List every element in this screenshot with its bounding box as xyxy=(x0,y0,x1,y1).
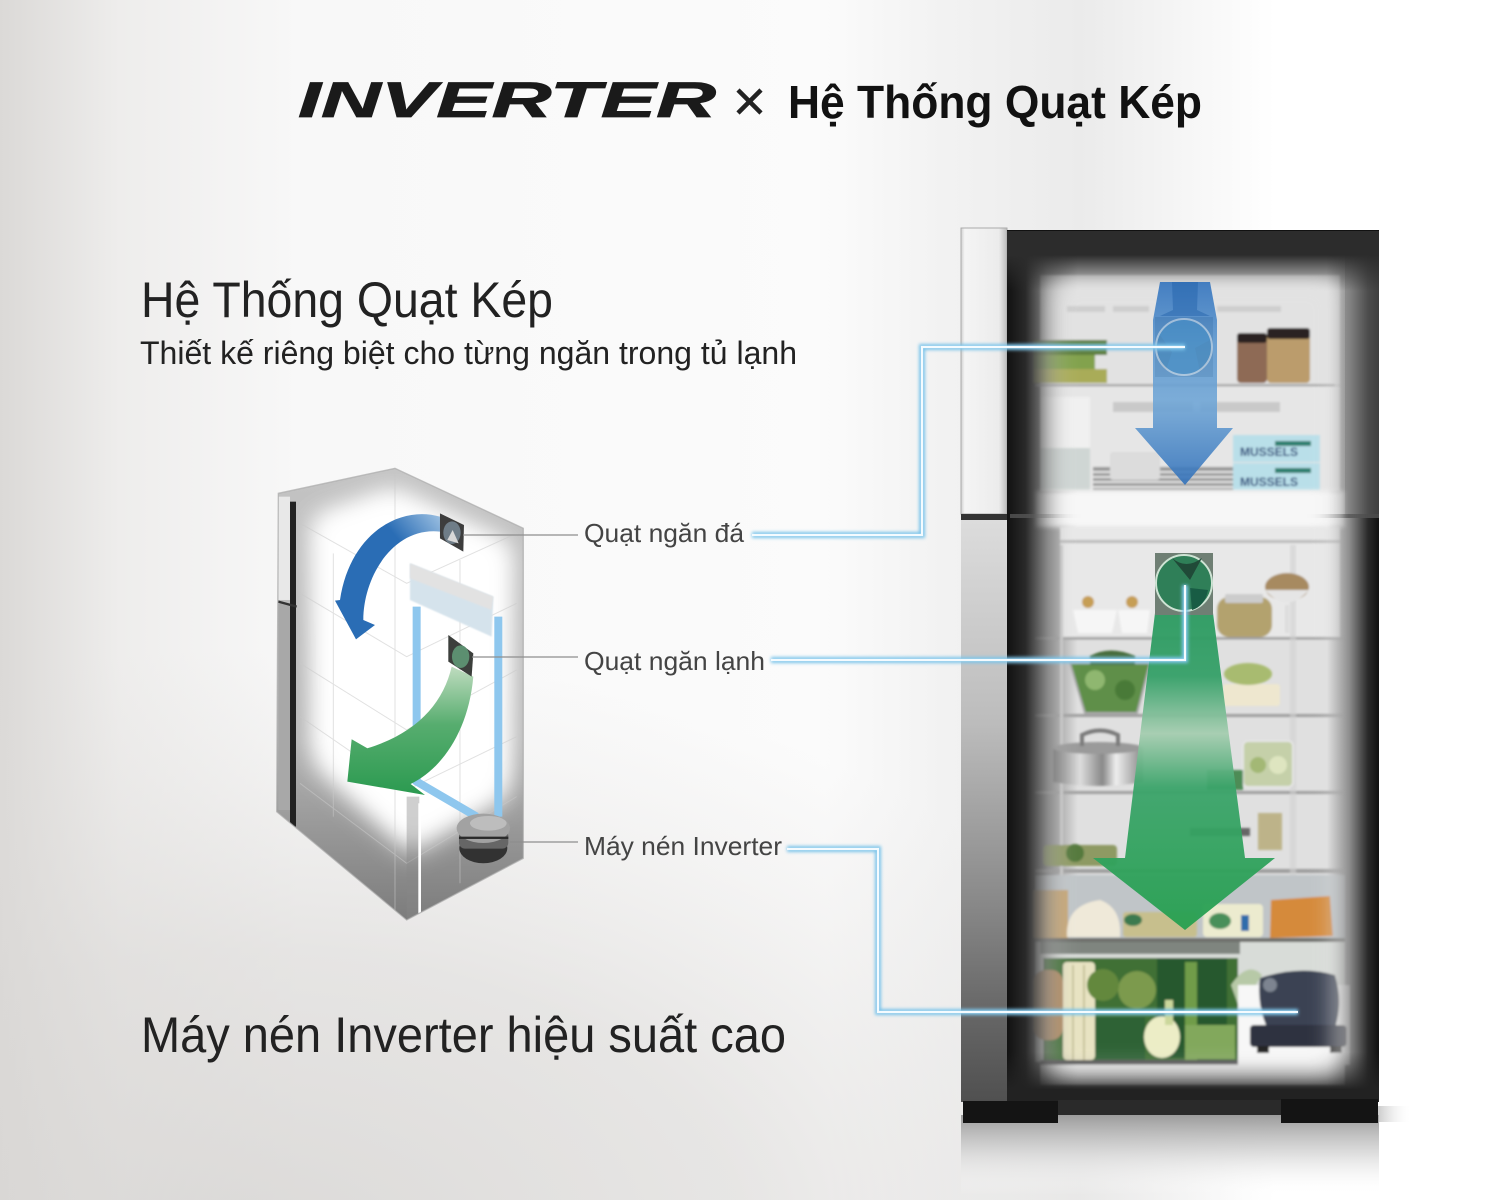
lit interior gradient xyxy=(1007,235,1379,1095)
freezer fan face over arrow xyxy=(1156,319,1212,375)
freezer fan xyxy=(1155,317,1213,377)
top fade xyxy=(1007,231,1379,291)
callout lines xyxy=(752,347,1298,1012)
line: freezer fan xyxy=(752,347,1185,535)
fridge fan xyxy=(448,635,473,677)
label: fridge fan: Quạt ngăn lạnh xyxy=(584,646,765,676)
label: freezer fan: Quạt ngăn đá xyxy=(584,518,745,548)
compressor in fridge xyxy=(1250,971,1347,1053)
left door side top xyxy=(961,228,1007,514)
heading: dual fan system: Hệ Thống Quạt Kép xyxy=(141,272,553,328)
vegetable drawer top row xyxy=(1033,875,1345,938)
blue down arrow xyxy=(1135,282,1233,485)
subheading: Thiết kế riêng biệt cho từng ngăn trong tủ lạnh xyxy=(140,335,797,371)
heading: inverter compressor: Máy nén Inverter hiệu suất cao xyxy=(141,1007,786,1063)
leader lines xyxy=(463,535,578,842)
door front base xyxy=(1007,230,1379,1102)
multiply sign xyxy=(738,90,761,113)
blue arrow xyxy=(335,514,440,639)
reflection xyxy=(961,1115,1379,1195)
green down arrow xyxy=(1093,613,1275,930)
foot shadow xyxy=(1378,1106,1412,1122)
cabinet outline xyxy=(277,468,523,920)
freezer shelf and contents: MUSSELS xyxy=(1240,445,1298,459)
refrigerant pipes xyxy=(417,607,498,817)
crisper vegetables xyxy=(1033,942,1350,1065)
front corner edge xyxy=(406,796,420,864)
heading: dual fan system xyxy=(140,272,797,371)
freezer shelf and contents xyxy=(1033,275,1340,491)
refrigerator photo xyxy=(961,228,1412,1195)
cabinet body xyxy=(277,468,523,920)
fridge shelves xyxy=(1035,637,1345,942)
title xyxy=(298,72,1202,128)
door tone right xyxy=(1345,236,1379,514)
freezer shelf and contents: MUSSELS xyxy=(1240,475,1298,489)
freezer fan xyxy=(440,513,464,552)
label: inverter compressor: Máy nén Inverter xyxy=(584,831,782,861)
inverter logo wordmark: INVERTER xyxy=(298,72,716,128)
line: compressor xyxy=(787,849,1298,1012)
bottom fade xyxy=(1007,1052,1379,1102)
shelf wire lines xyxy=(300,470,517,917)
interior contents xyxy=(1033,275,1350,1085)
divider band xyxy=(1035,491,1345,527)
title text: Hệ Thống Quạt Kép xyxy=(788,76,1202,128)
fridge feet xyxy=(963,1099,1378,1123)
isometric fridge diagram xyxy=(277,468,523,920)
green arrow xyxy=(347,667,473,795)
food items xyxy=(1043,573,1309,866)
left door side bottom xyxy=(961,520,1007,1102)
line: fridge fan xyxy=(771,585,1185,660)
compressor xyxy=(457,814,510,863)
fridge fan xyxy=(1155,553,1213,615)
evaporator xyxy=(410,563,493,637)
door side stripe xyxy=(290,502,296,827)
